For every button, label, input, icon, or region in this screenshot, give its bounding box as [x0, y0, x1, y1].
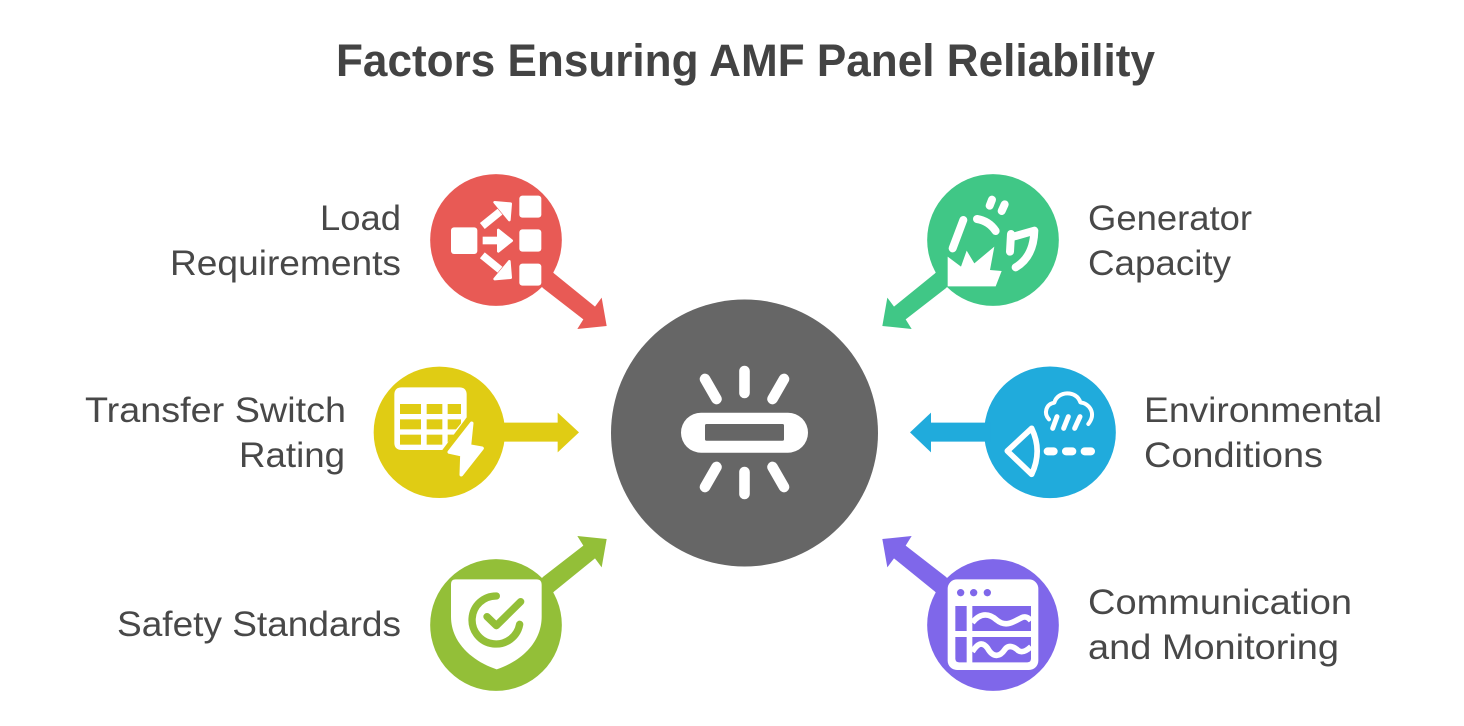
label: Communication and Monitoring: Communication [1088, 583, 1352, 622]
icon: indicator light [681, 371, 808, 494]
label: Transfer Switch Rating: Transfer Switch [85, 391, 346, 430]
factor: Safety Standards [117, 536, 607, 691]
factor: Generator Capacity [882, 174, 1252, 329]
green circle with arrow and generator icon [882, 174, 1059, 329]
label: Environmental Conditions: Conditions [1144, 436, 1323, 475]
label: Transfer Switch Rating: Rating [239, 436, 345, 475]
label: Environmental Conditions: Environmental [1144, 391, 1382, 430]
label: Generator Capacity: Capacity [1088, 244, 1232, 283]
central hub [611, 300, 878, 566]
factor: Communication and Monitoring [882, 536, 1352, 691]
factor: Load Requirements [170, 174, 607, 329]
lime circle with arrow and shield icon [430, 536, 607, 691]
factor: Transfer Switch Rating [85, 367, 579, 498]
blue circle with arrow and weather icon [910, 366, 1116, 498]
label: Communication and Monitoring: and Monitoring [1088, 628, 1339, 667]
yellow circle with arrow and table icon [374, 367, 579, 498]
label: Environmental Conditions [1144, 391, 1382, 475]
label: Load Requirements: Requirements [170, 244, 401, 283]
red circle with arrow and flow icon [430, 174, 607, 329]
label: Load Requirements: Load [320, 199, 401, 238]
label: Safety Standards: Safety Standards [117, 605, 401, 644]
purple circle with arrow and dashboard icon [882, 536, 1059, 691]
label: Communication and Monitoring [1088, 583, 1352, 667]
label: Generator Capacity: Generator [1088, 199, 1252, 238]
label: Transfer Switch Rating [85, 391, 346, 475]
label: Load Requirements [170, 199, 401, 283]
label: Generator Capacity [1088, 199, 1252, 283]
title: Factors Ensuring AMF Panel Reliability [336, 35, 1155, 86]
factor: Environmental Conditions [910, 366, 1382, 498]
